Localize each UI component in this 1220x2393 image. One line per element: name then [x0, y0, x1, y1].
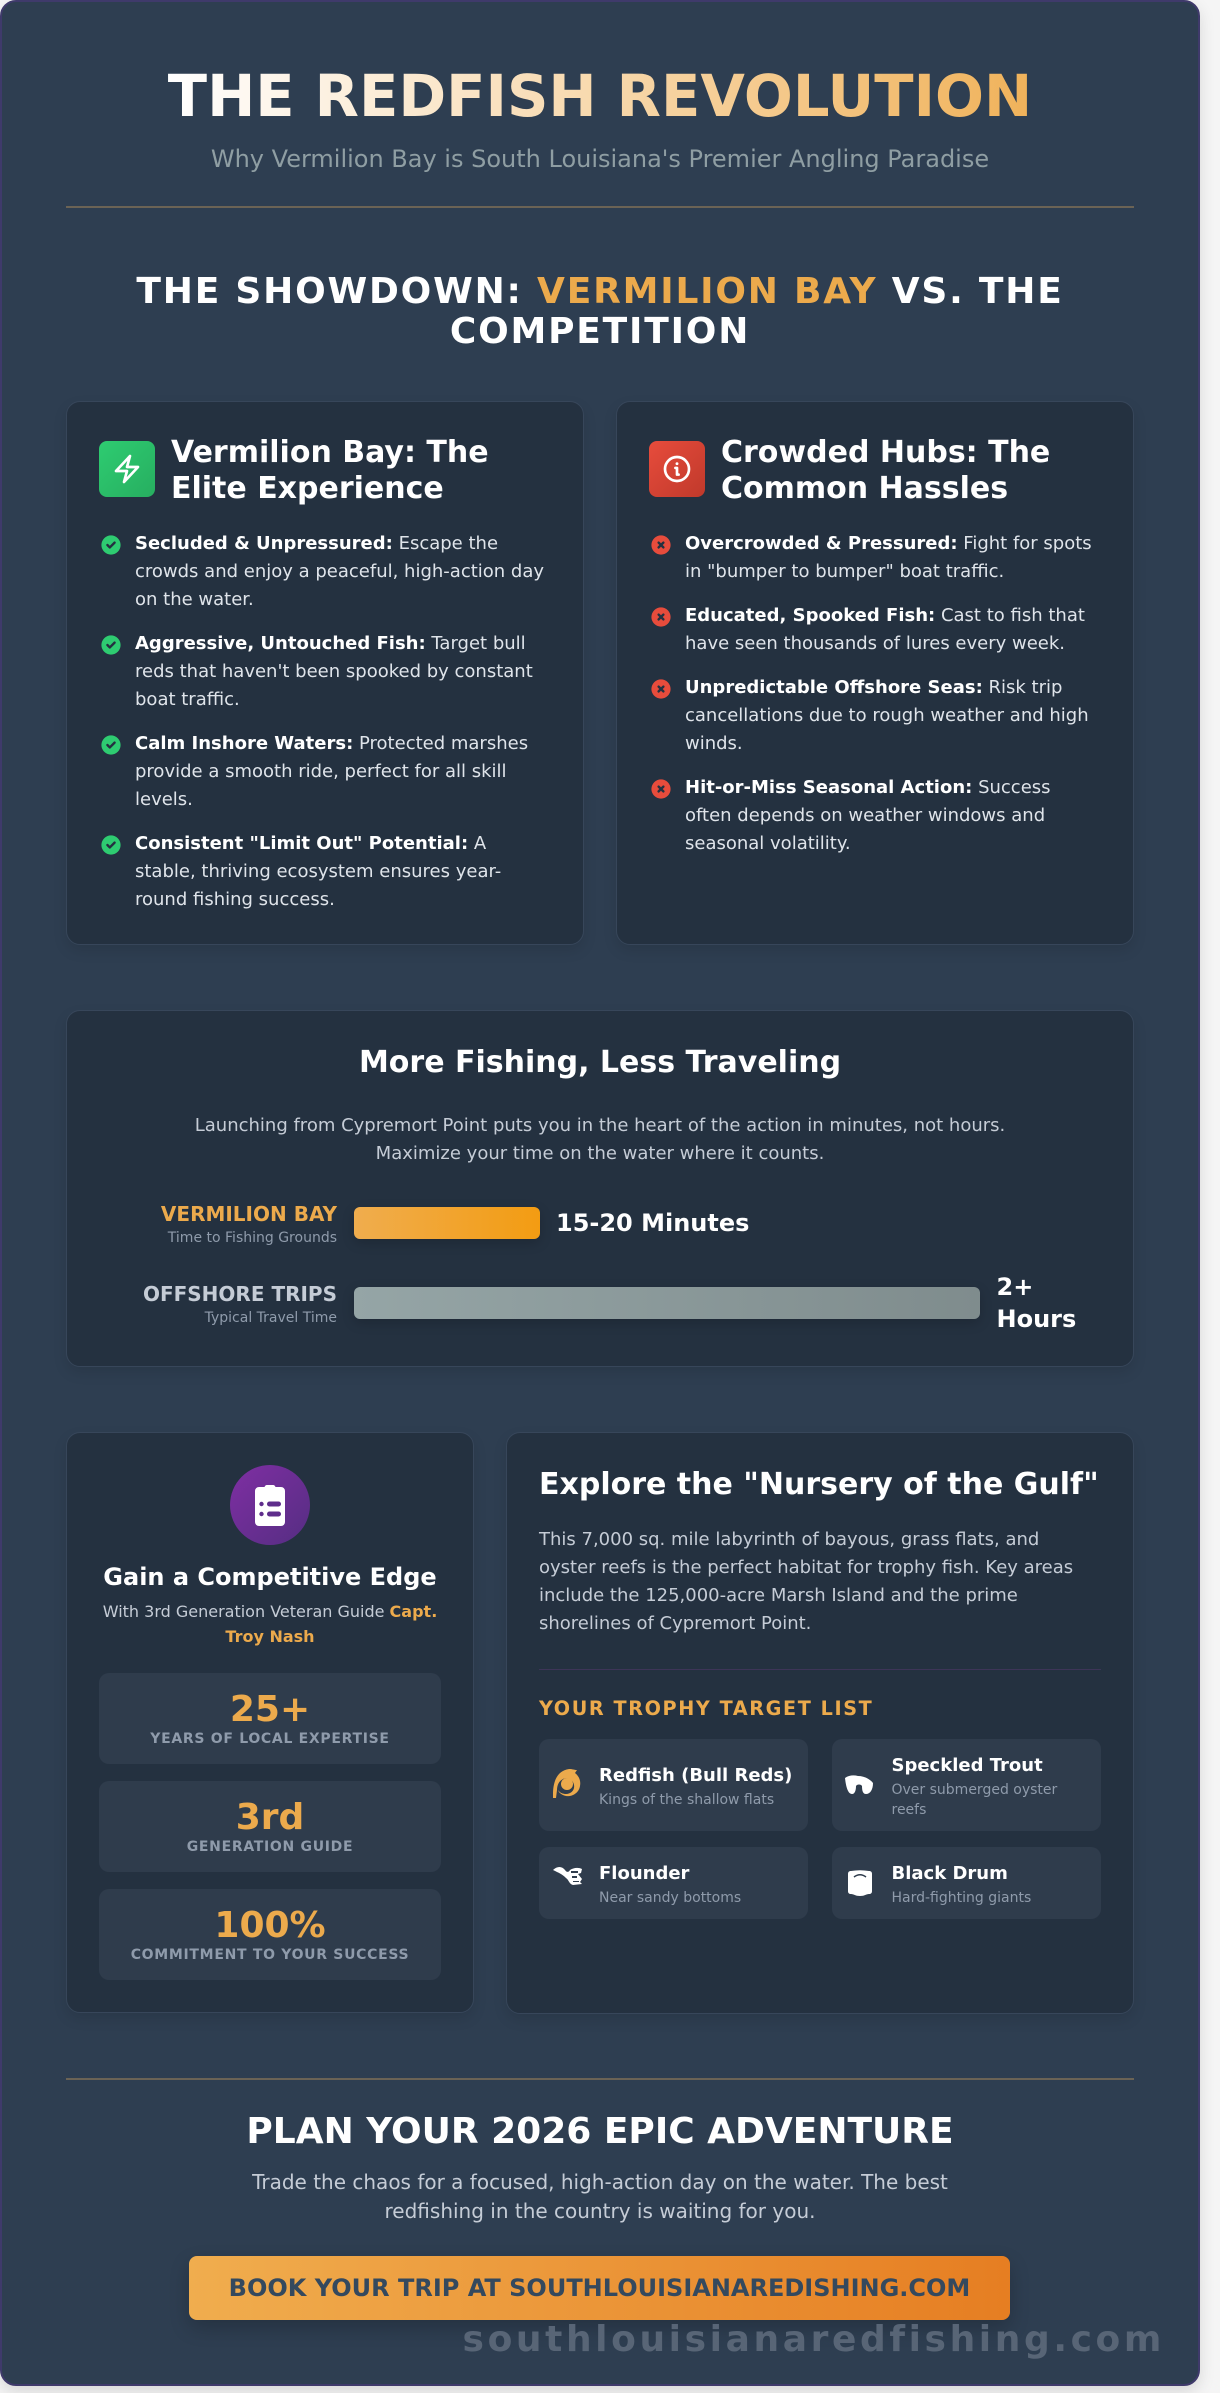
footer text: redfishing in the country is waiting for you.	[385, 2199, 815, 2223]
bar row: offshore	[143, 1273, 1076, 1333]
list item	[135, 533, 544, 610]
heading: Elite Experience	[171, 471, 444, 506]
section heading: the showdown: THE SHOWDOWN: VERMILION BAY VS. THE	[136, 271, 1064, 312]
paragraph: oyster reefs is the perfect habitat for trophy fish. Key areas	[539, 1557, 1073, 1578]
stat	[99, 1781, 441, 1872]
fish: trout	[832, 1739, 1101, 1831]
list item: boat traffic.	[135, 689, 240, 710]
name: Redfish (Bull Reds)	[599, 1765, 792, 1786]
panel: explore nursery	[506, 1432, 1134, 2014]
list item: round fishing success.	[135, 889, 335, 910]
subtitle: Why Vermilion Bay is South Louisiana's Premier Angling Paradise	[211, 145, 989, 173]
text	[103, 1602, 437, 1646]
note: Kings of the shallow flats	[599, 1792, 774, 1808]
note: reefs	[892, 1802, 926, 1818]
list item: provide a smooth ride, perfect for all skill	[135, 761, 507, 782]
list item	[685, 533, 1092, 582]
paragraph: include the 125,000-acre Marsh Island and the prime	[539, 1585, 1018, 1606]
stat: 25+	[230, 1689, 310, 1730]
name: Flounder	[599, 1863, 689, 1884]
heading: More Fishing, Less Traveling	[359, 1045, 841, 1080]
x icon	[651, 779, 671, 799]
panel: more fishing	[66, 1010, 1134, 1367]
check icon	[101, 635, 121, 655]
footer heading: PLAN YOUR 2026 EPIC ADVENTURE	[246, 2111, 954, 2152]
list item: cancellations due to rough weather and high	[685, 705, 1089, 726]
value: 15-20 Minutes	[556, 1209, 749, 1237]
heading	[721, 435, 1050, 506]
note: Hard-fighting giants	[892, 1890, 1031, 1906]
description	[195, 1115, 1005, 1164]
stat	[99, 1889, 441, 1980]
fish: black drum	[832, 1847, 1101, 1919]
list item	[685, 605, 1085, 654]
fish: redfish	[539, 1739, 808, 1831]
list item: Hit-or-Miss Seasonal Action: Success	[685, 777, 1051, 798]
section heading: the showdown	[136, 271, 1064, 352]
footer text	[252, 2170, 948, 2223]
heading: Gain a Competitive Edge	[103, 1563, 437, 1591]
list item: levels.	[135, 789, 193, 810]
value	[996, 1273, 1076, 1333]
note: Over submerged oyster	[892, 1782, 1057, 1798]
list item: Educated, Spooked Fish: Cast to fish that	[685, 605, 1085, 626]
label: OFFSHORE TRIPS	[143, 1282, 337, 1306]
name: Black Drum	[892, 1863, 1008, 1884]
paragraph	[538, 1529, 1073, 1634]
list item	[135, 833, 501, 910]
paragraph: shorelines of Cypremort Point.	[539, 1613, 811, 1634]
list item: reds that haven't been spooked by constant	[135, 661, 533, 682]
heading: Crowded Hubs: The	[721, 435, 1050, 470]
description: Maximize your time on the water where it counts.	[376, 1143, 824, 1164]
name: Speckled Trout	[892, 1755, 1043, 1776]
heading	[171, 435, 489, 506]
call to action button: BOOK YOUR TRIP AT SOUTHLOUISIANAREDISHING.COM	[229, 2274, 970, 2302]
list item: have seen thousands of lures every week.	[685, 633, 1065, 654]
call to action button	[189, 2256, 1010, 2320]
list item: winds.	[685, 733, 743, 754]
section heading: the showdown: COMPETITION	[450, 311, 750, 352]
watermark: southlouisianaredfishing.com	[463, 2319, 1165, 2360]
list item	[685, 777, 1051, 854]
check icon	[101, 535, 121, 555]
x icon	[651, 607, 671, 627]
note	[892, 1782, 1058, 1818]
stat	[99, 1673, 441, 1764]
stat: YEARS OF LOCAL EXPERTISE	[150, 1731, 390, 1747]
text: With 3rd Generation Veteran Guide Capt.	[103, 1602, 437, 1621]
list item: Consistent "Limit Out" Potential: A	[135, 833, 486, 854]
sublabel: Typical Travel Time	[205, 1310, 337, 1326]
stat: 3rd	[236, 1797, 304, 1838]
icon	[553, 1867, 582, 1885]
icon	[848, 1870, 872, 1896]
check icon	[101, 735, 121, 755]
heading: Common Hassles	[721, 471, 1008, 506]
list item: on the water.	[135, 589, 254, 610]
subheading: YOUR TROPHY TARGET LIST	[539, 1697, 873, 1720]
label: VERMILION BAY	[161, 1202, 337, 1226]
bar	[354, 1287, 980, 1319]
list item: often depends on weather windows and	[685, 805, 1045, 826]
panel: competitive edge	[66, 1432, 474, 2013]
value: 2+	[996, 1273, 1033, 1301]
check icon	[101, 835, 121, 855]
bar	[354, 1207, 540, 1239]
icon: info	[649, 441, 705, 497]
heading: Explore the "Nursery of the Gulf"	[539, 1467, 1099, 1502]
list item	[135, 733, 528, 810]
paragraph: This 7,000 sq. mile labyrinth of bayous, grass flats, and	[539, 1529, 1039, 1550]
icon	[845, 1775, 873, 1794]
value: Hours	[996, 1305, 1076, 1333]
x icon	[651, 535, 671, 555]
icon: clipboard	[230, 1465, 310, 1545]
stat: 100%	[214, 1905, 326, 1946]
list item: Calm Inshore Waters: Protected marshes	[135, 733, 528, 754]
list item: Unpredictable Offshore Seas: Risk trip	[685, 677, 1062, 698]
list item: Overcrowded & Pressured: Fight for spots	[685, 533, 1092, 554]
icon: lightning bolt	[99, 441, 155, 497]
sublabel: Time to Fishing Grounds	[168, 1230, 337, 1246]
list item: Aggressive, Untouched Fish: Target bull	[135, 633, 526, 654]
list item: stable, thriving ecosystem ensures year-	[135, 861, 501, 882]
note: Near sandy bottoms	[599, 1890, 741, 1906]
text: Troy Nash	[225, 1627, 315, 1646]
list item	[685, 677, 1089, 754]
list item: Secluded & Unpressured: Escape the	[135, 533, 498, 554]
footer text: Trade the chaos for a focused, high-action day on the water. The best	[252, 2170, 948, 2194]
stat: COMMITMENT TO YOUR SUCCESS	[131, 1947, 409, 1963]
stat: GENERATION GUIDE	[187, 1839, 353, 1855]
title: THE REDFISH REVOLUTION	[168, 63, 1032, 130]
panel: crowded hubs	[616, 401, 1134, 945]
heading: Vermilion Bay: The	[171, 435, 489, 470]
list item: seasonal volatility.	[685, 833, 851, 854]
x icon	[651, 679, 671, 699]
list item: in "bumper to bumper" boat traffic.	[685, 561, 1004, 582]
panel: vermilion bay	[66, 401, 584, 945]
list item: crowds and enjoy a peaceful, high-action day	[135, 561, 544, 582]
bar row: vermilion bay	[161, 1202, 749, 1246]
icon	[553, 1769, 580, 1798]
list item	[135, 633, 533, 710]
fish: flounder	[539, 1847, 808, 1919]
description: Launching from Cypremort Point puts you in the heart of the action in minutes, not hours.	[195, 1115, 1005, 1136]
